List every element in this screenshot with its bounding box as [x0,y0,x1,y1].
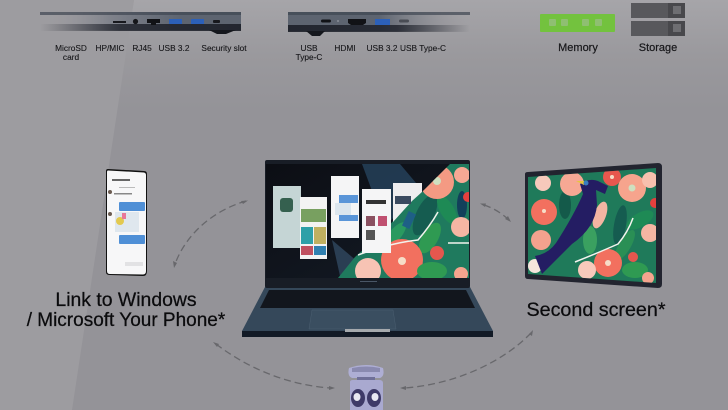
arrow: laptop to earbuds, left [213,342,335,390]
laptop lid [265,160,470,288]
left port labels: USB 3.2 [159,43,190,53]
left port labels: card [63,52,79,62]
right port labels: USB Type-C [400,43,446,53]
left port labels: HP/MIC [95,43,125,53]
left port labels [55,43,247,62]
samsung wordmark [360,281,377,282]
right port labels: USB [300,43,318,53]
arrow: laptop to tablet [480,204,511,222]
right port labels: USB 3.2 [367,43,398,53]
icon: earbuds case [348,365,384,410]
right port labels [296,43,446,62]
heading: link to windows: / Microsoft Your Phone* [27,310,226,331]
icon: memory [540,14,615,32]
left side port strip [40,12,241,34]
arrow: phone to laptop [173,200,248,268]
icon: phone [106,169,147,276]
laptop base edge [242,331,493,337]
left port labels: Security slot [201,43,247,53]
heading: second screen: Second screen* [526,299,666,321]
storage label: Storage [639,42,677,54]
tablet [525,163,662,288]
heading: link to windows: Link to Windows [55,289,197,311]
left port labels: MicroSD [55,43,87,53]
memory label: Memory [558,42,598,54]
laptop keyboard [260,290,475,308]
laptop screen [266,164,473,284]
heading: link to windows [27,289,226,331]
right port labels: Type-C [296,52,322,62]
laptop [242,160,493,337]
bird [535,180,608,274]
left port labels: RJ45 [132,43,152,53]
app windows on screen [273,176,422,259]
laptop keyboard deck [242,287,493,331]
right port labels: HDMI [334,43,356,53]
arrow: laptop to earbuds, right [400,330,533,390]
tablet screen [528,168,660,284]
laptop touchpad [309,310,396,329]
icon: storage [631,3,685,36]
right side port strip [288,12,470,36]
